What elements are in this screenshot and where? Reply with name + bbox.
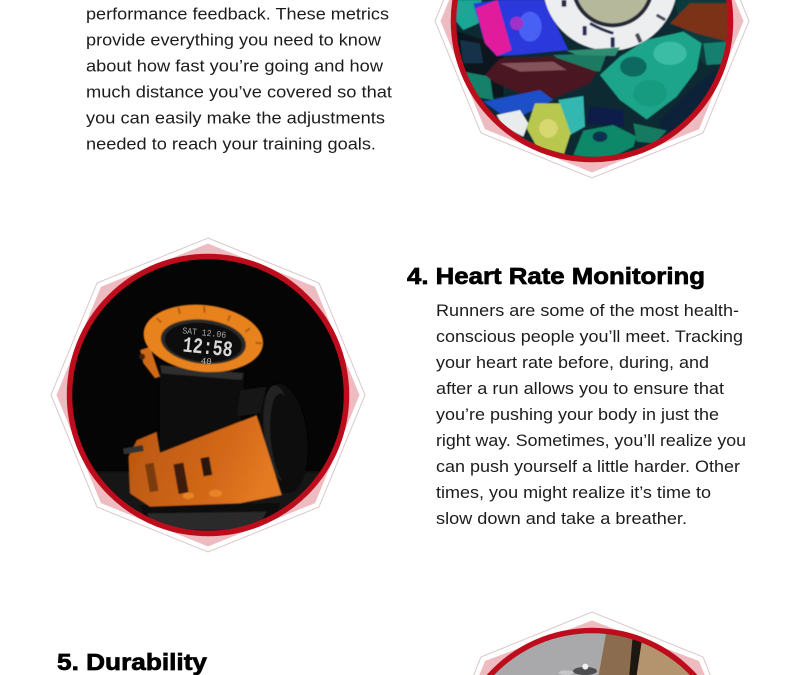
text block: section 4 description: Runners are some of the most health- [436, 301, 739, 320]
text block: section 4 description: can push yourself a little harder. Other [436, 457, 740, 476]
watch display text: 12:58 [181, 333, 234, 364]
text block: section 3 description: much distance you’ve covered so that [86, 82, 392, 102]
text block: section 3 description: about how fast you’re going and how [86, 56, 384, 76]
panel: section 4 photo badge [51, 238, 365, 552]
watch display text [182, 328, 232, 364]
watch display text: SAT 12.06 [182, 326, 227, 341]
panel: section 3 photo badge [435, 0, 749, 178]
text block: section 4 description [436, 301, 746, 528]
text block: section 3 description: performance feedback. These metrics [86, 4, 389, 24]
text block: section 3 description: provide everything you need to know [86, 30, 382, 50]
text block: section 4 description: slow down and take a breather. [436, 509, 687, 528]
icon: watch strap back [160, 367, 245, 453]
text block: section 4 description: after a run allows you to ensure that [436, 379, 724, 398]
text block: section 3 description: you can easily make the adjustments [86, 108, 385, 128]
text block: section 4 description: conscious people you’ll meet. Tracking [436, 327, 743, 346]
text block: section 4 description: your heart rate before, during, and [436, 353, 709, 372]
heading: 4. Heart Rate Monitoring: 4. Heart Rate Monitoring [407, 263, 705, 289]
text block: section 3 description: needed to reach your training goals. [86, 134, 376, 154]
watch display text: 40 [200, 356, 212, 367]
heading: 5. Durability: 5. Durability [57, 649, 207, 675]
panel: section 5 photo badge [474, 612, 710, 675]
text block: section 4 description: times, you might realize it’s time to [436, 483, 711, 502]
text block: section 3 description [86, 4, 392, 154]
text block: section 4 description: right way. Sometimes, you’ll realize you [436, 431, 746, 450]
text block: section 4 description: you’re pushing your body in just the [436, 405, 719, 424]
